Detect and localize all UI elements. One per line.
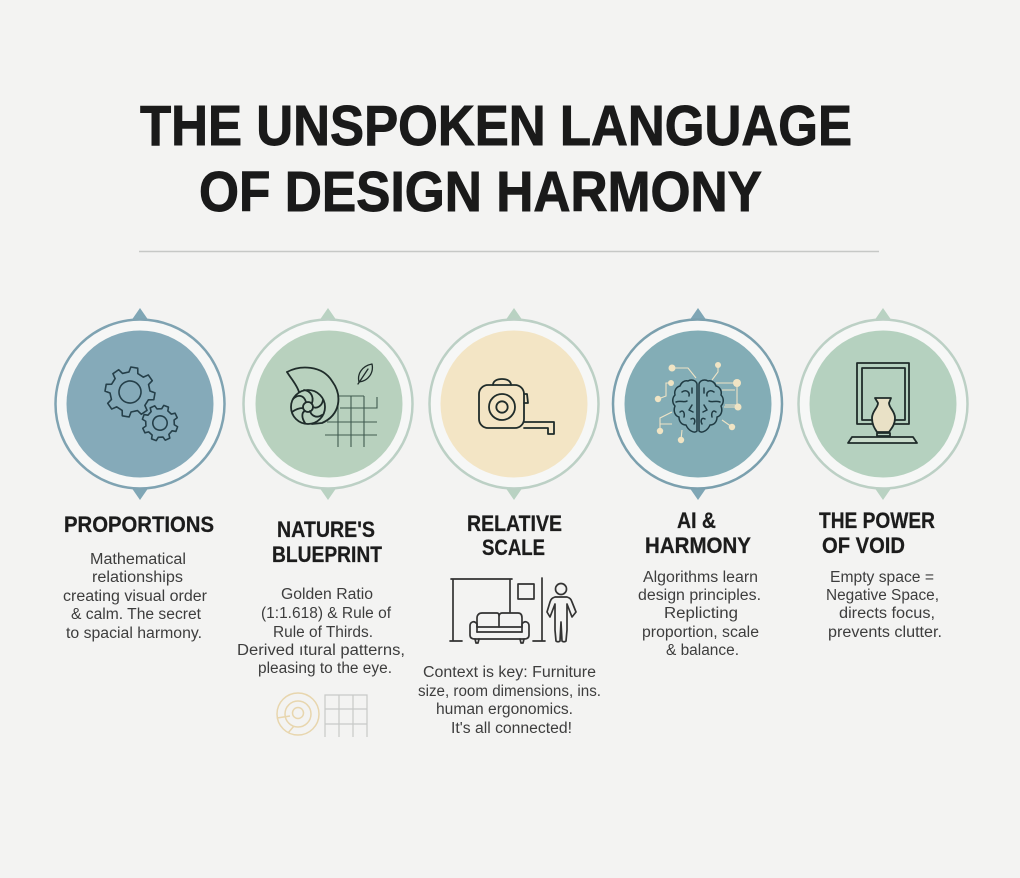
icon: gears [101,363,183,446]
heading: the power of void [819,508,935,558]
icon: tape measure [479,379,554,434]
heading: proportions: PROPORTIONS [64,512,214,537]
panel: the power of void [798,308,968,641]
text: void description: Empty space = [830,569,934,586]
badge: scale circle [430,308,598,500]
heading: the power of void: THE POWER [819,508,935,533]
text: nature description [237,586,405,677]
text: proportions description: & calm. The secret [71,606,202,623]
icon: leaf [358,364,372,384]
text: proportions description: Mathematical [90,551,186,568]
icon: golden spiral [277,693,319,735]
heading: AI and harmony [645,508,751,558]
text: AI description [638,569,761,659]
panel: relative scale [418,308,601,737]
panel: nature's blueprint [237,308,412,737]
text: nature description: (1:1.618) & Rule of [261,605,392,622]
text: proportions description: relationships [92,569,183,586]
badge: proportions circle [56,308,224,500]
text: scale description: human ergonomics. [436,701,573,718]
heading: the power of void: OF VOID [822,533,905,558]
text: proportions description [63,551,207,642]
badge: AI circle [613,308,782,500]
illustration: room with sofa and person [450,578,576,643]
text: proportions description: to spacial harmony. [66,625,202,642]
text: nature description: Rule of Thirds. [273,624,373,641]
title [140,94,852,224]
text: proportions description: creating visual order [63,588,207,605]
text: void description: directs focus, [839,605,935,622]
heading: nature's blueprint [272,517,382,567]
text: AI description: Replicting [664,605,738,622]
heading: nature's blueprint: NATURE'S [277,517,375,542]
heading: AI and harmony: AI & [677,508,716,533]
panel: proportions [56,308,224,642]
text: scale description: size, room dimensions, ins. [418,683,601,700]
text: nature description: pleasing to the eye. [258,660,392,677]
heading: nature's blueprint: BLUEPRINT [272,542,382,567]
text: void description: prevents clutter. [828,624,942,641]
icon: nautilus shell [287,368,338,424]
text: nature description: Golden Ratio [281,586,373,603]
icon: circuit lines and nodes [655,362,742,443]
text: scale description: Context is key: Furniture [423,664,596,681]
text: scale description [418,664,601,737]
icon: brain [673,380,723,432]
panel: AI and harmony [613,308,782,659]
text: void description [826,569,942,641]
badge: void circle [798,308,968,500]
icon: grid [325,396,377,447]
text: AI description: & balance. [666,642,739,659]
text: nature description: Derived ıtural patterns, [237,642,405,659]
icon: vase on shelf [848,398,917,443]
title: THE UNSPOKEN LANGUAGE [140,94,852,158]
text: AI description: design principles. [638,587,761,604]
text: void description: Negative Space, [826,587,939,604]
icon: rule of thirds grid [325,695,367,737]
text: scale description: It's all connected! [451,720,572,737]
heading: AI and harmony: HARMONY [645,533,751,558]
heading: relative scale: SCALE [482,535,545,560]
icon: picture frame [857,363,909,424]
text: AI description: proportion, scale [642,624,759,641]
heading: relative scale [467,511,562,560]
title: OF DESIGN HARMONY [199,160,762,224]
heading: relative scale: RELATIVE [467,511,562,536]
text: AI description: Algorithms learn [643,569,758,586]
badge: nature circle [244,308,412,500]
